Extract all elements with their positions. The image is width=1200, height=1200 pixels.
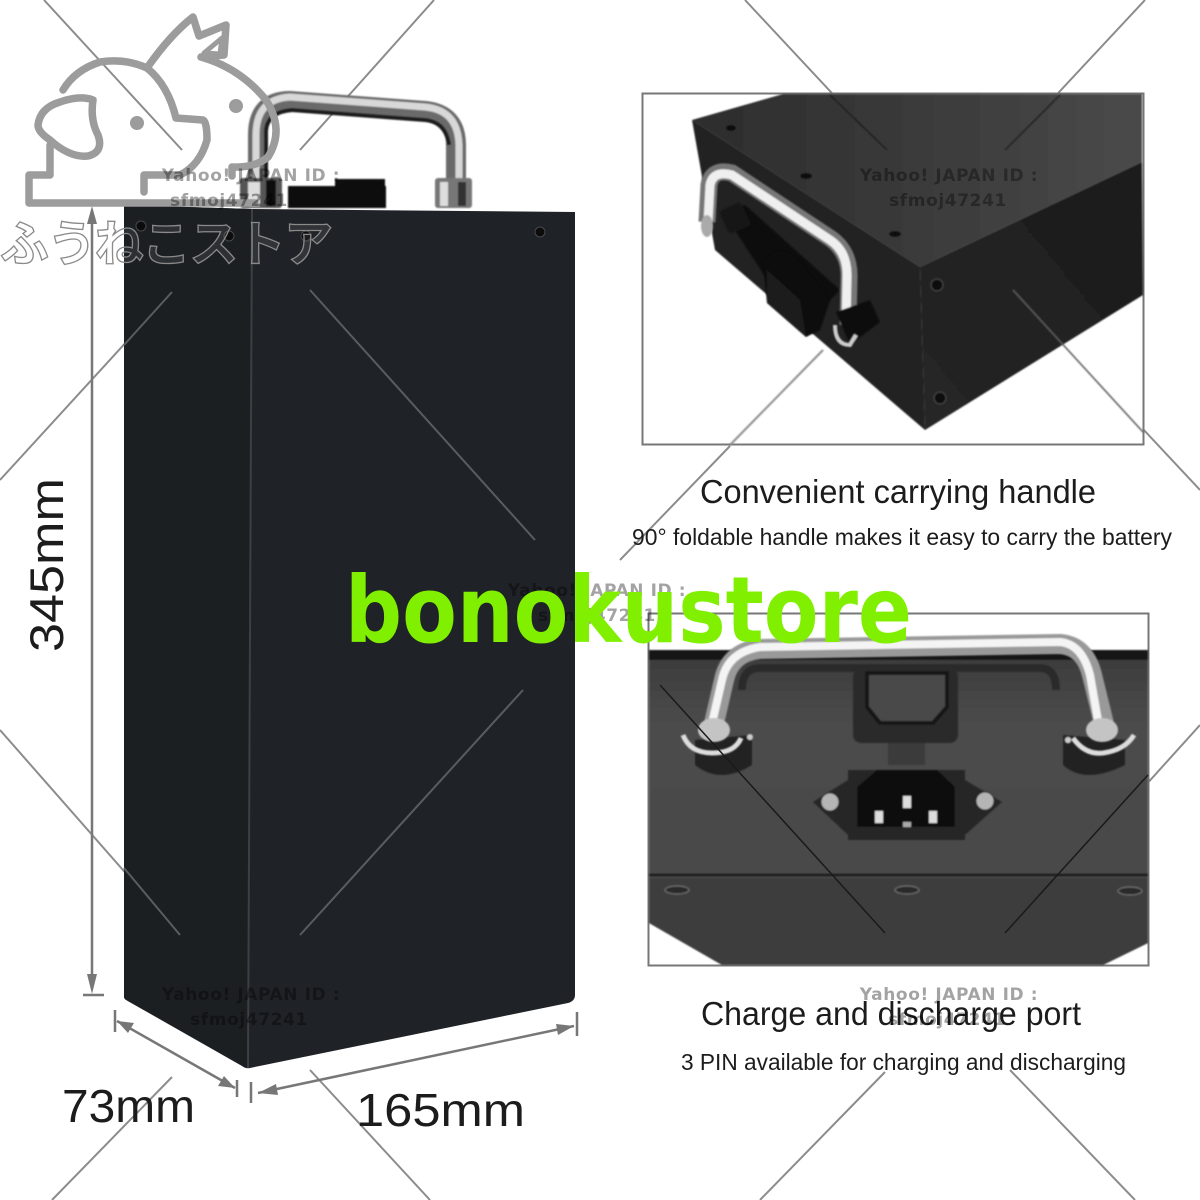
panel: main battery product view with dimensions xyxy=(20,97,577,1136)
chrome handle xyxy=(683,642,1134,753)
panel: charge port close-up photo xyxy=(648,614,1148,966)
Yahoo ID watermark: top left: Yahoo! JAPAN ID : xyxy=(161,166,340,186)
chrome handle xyxy=(701,172,880,345)
caption: port description: 3 PIN available for charging and discharging xyxy=(681,1049,1126,1075)
port cover xyxy=(763,251,830,337)
Yahoo ID watermark: bottom right: sfmoj47241 xyxy=(888,1010,1006,1030)
battery corner view xyxy=(692,94,1143,445)
store watermark: hiragana outline text: ふうねこストア xyxy=(0,218,333,272)
battery end face xyxy=(649,650,1148,965)
height dimension arrow xyxy=(77,203,107,995)
Yahoo ID watermark: centre: sfmoj47241 xyxy=(538,606,656,626)
Yahoo ID watermark: bottom left: Yahoo! JAPAN ID : xyxy=(161,985,340,1005)
handle mounts xyxy=(695,734,1125,775)
Yahoo ID watermark: bottom right: Yahoo! JAPAN ID : xyxy=(859,985,1038,1005)
rubber port cover xyxy=(853,668,958,765)
heading: Convenient carrying handle: Convenient carrying handle xyxy=(700,473,1096,510)
caption: handle description: 90° foldable handle makes it easy to carry the battery xyxy=(632,524,1172,550)
heading: Charge and discharge port: Charge and discharge port xyxy=(701,995,1081,1032)
label: 345mm: 345mm xyxy=(20,478,73,652)
Yahoo ID watermark: top right: Yahoo! JAPAN ID : xyxy=(859,166,1038,186)
carrying handle on battery top xyxy=(240,97,472,208)
Yahoo ID watermark: top right: sfmoj47241 xyxy=(889,191,1007,211)
Yahoo ID watermark: bottom left: sfmoj47241 xyxy=(190,1010,308,1030)
label: 73mm: 73mm xyxy=(62,1080,195,1132)
3-pin socket xyxy=(813,770,1002,840)
battery case xyxy=(124,205,575,1068)
panel: handle close-up photo xyxy=(642,94,1144,445)
store name overlay: bonokustore: bonokustore xyxy=(345,557,912,664)
Yahoo ID watermark: top left: sfmoj47241 xyxy=(170,191,288,211)
store logo: outlined animals xyxy=(29,17,276,203)
depth dimension arrow xyxy=(115,1010,237,1097)
label: 165mm: 165mm xyxy=(356,1084,525,1136)
Yahoo ID watermark: centre: Yahoo! JAPAN ID : xyxy=(507,581,686,601)
width dimension arrow xyxy=(251,1012,577,1103)
